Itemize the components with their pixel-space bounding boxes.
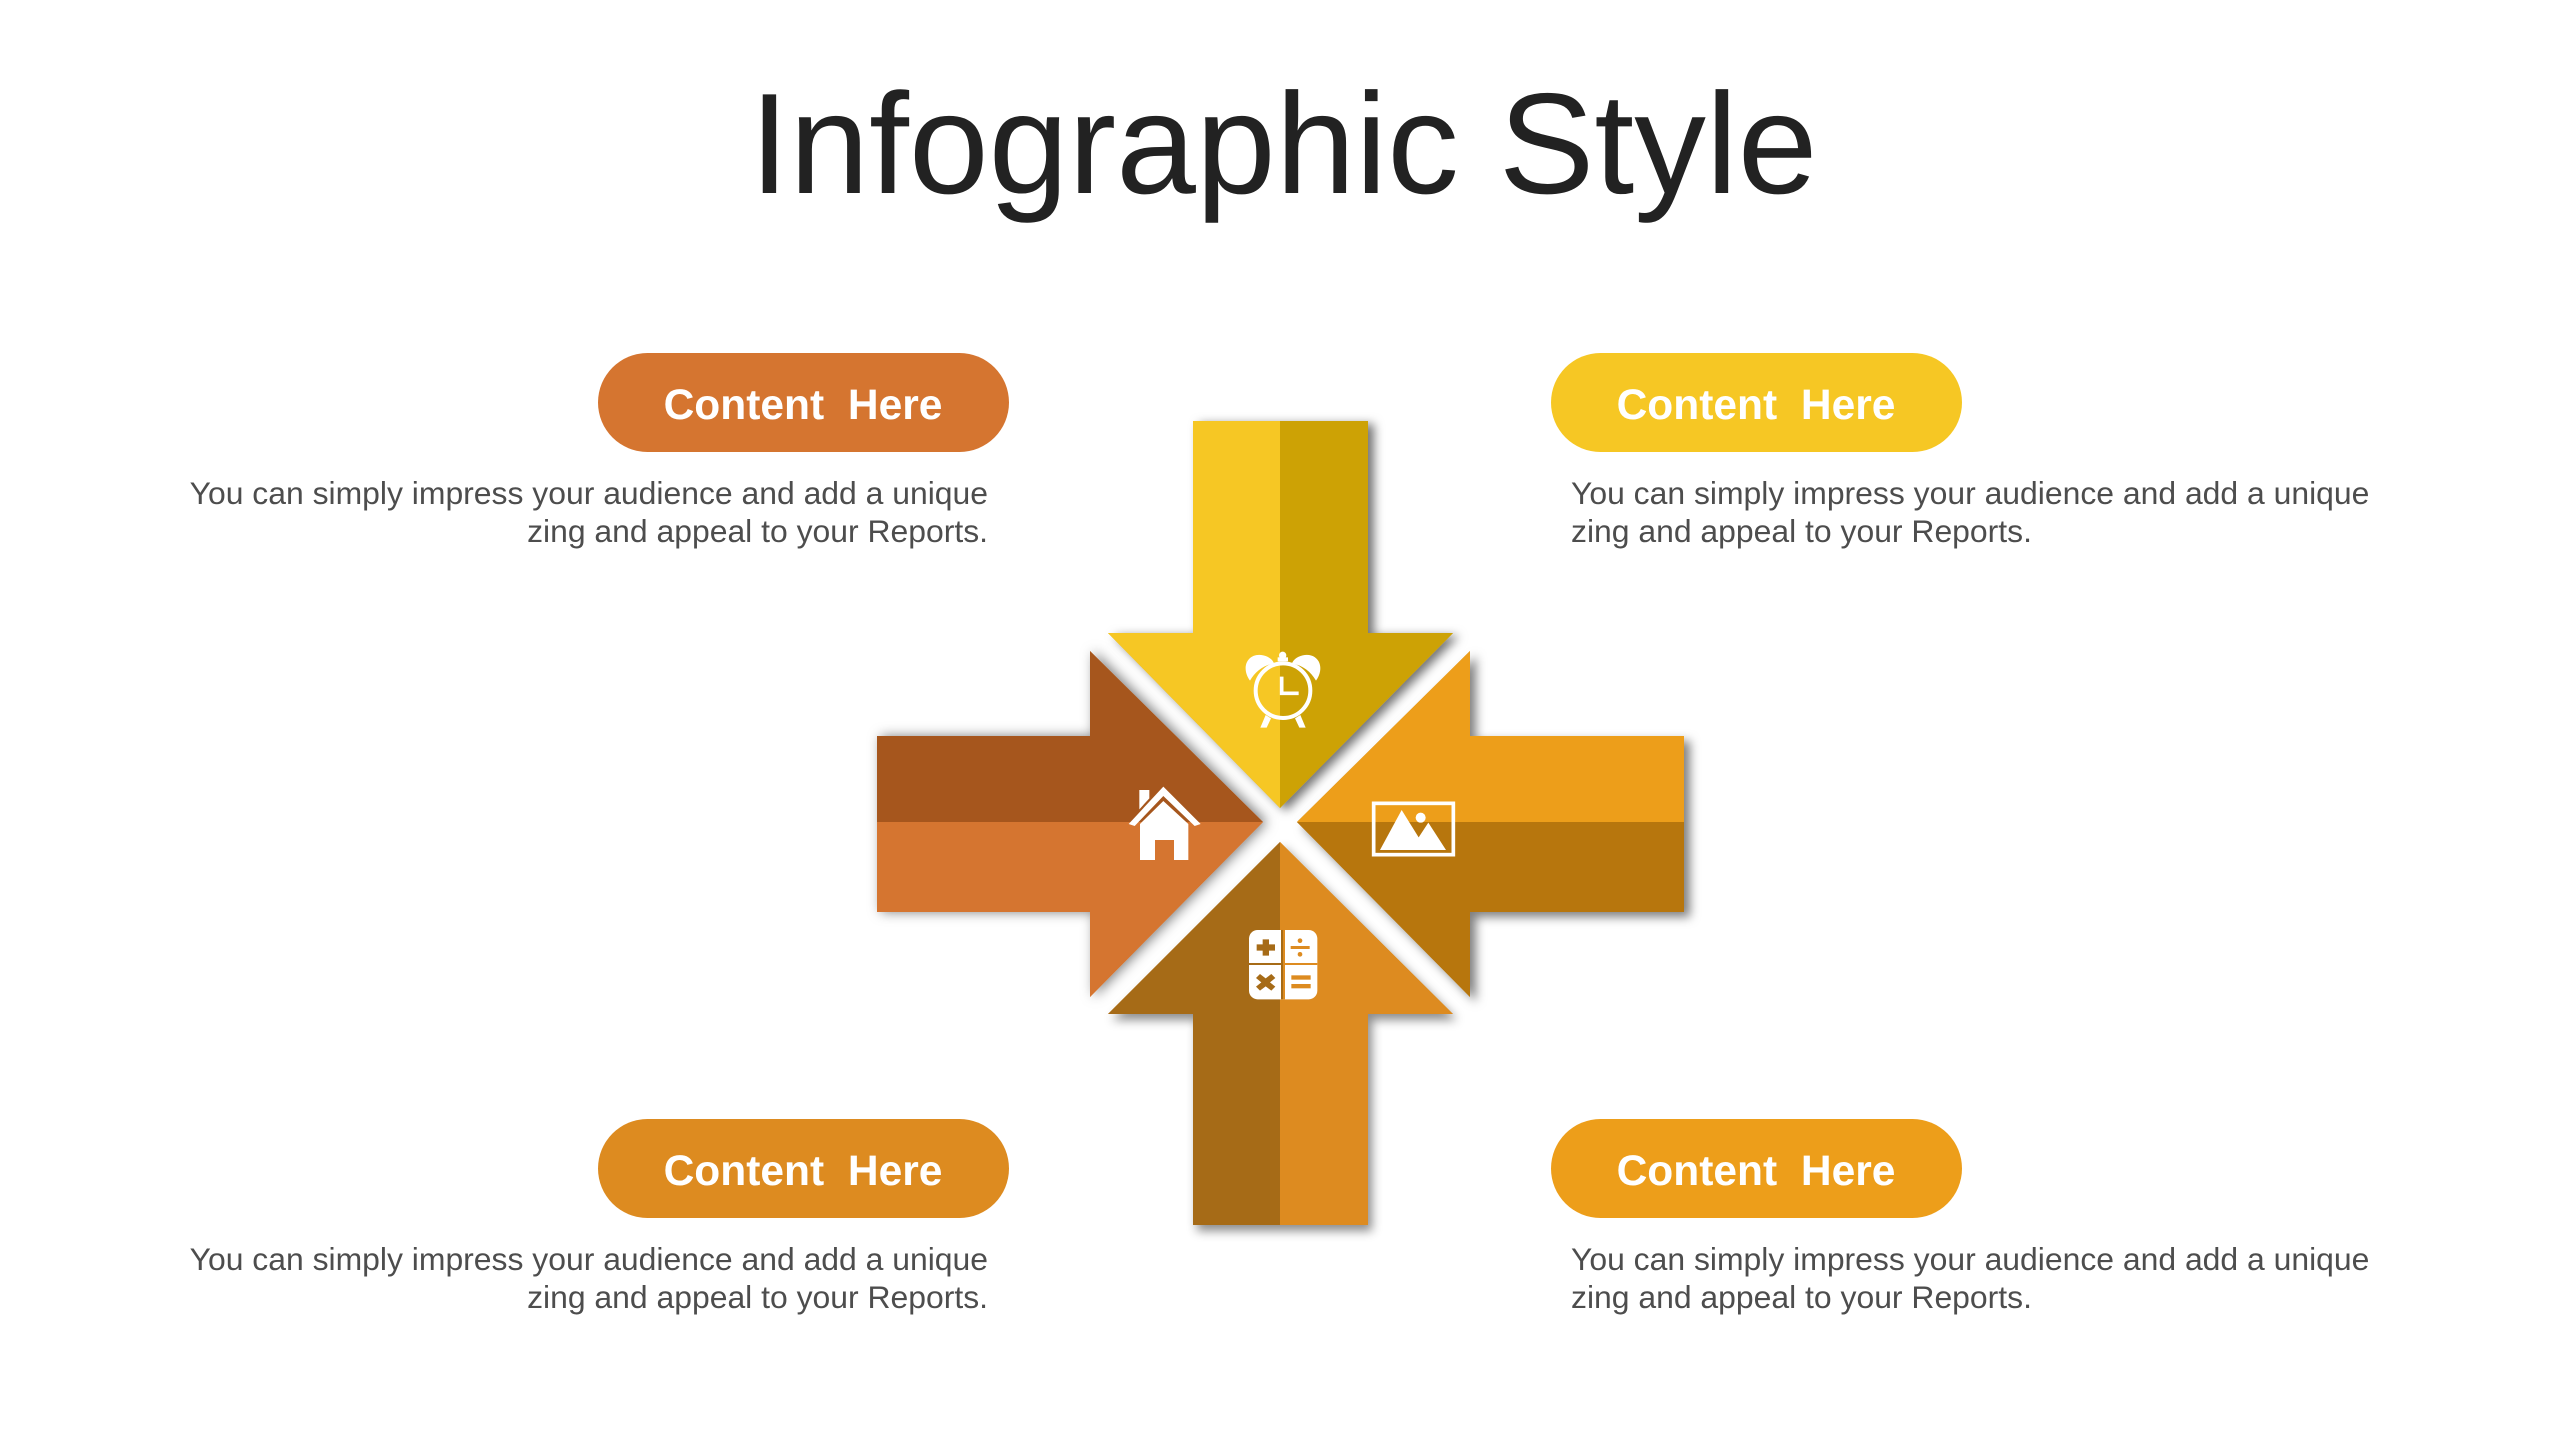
icon: calculator bbox=[1249, 930, 1317, 999]
title: Infographic Style bbox=[750, 64, 1817, 224]
pill: bottom-left bbox=[598, 1119, 1009, 1218]
arrow: top (clock) bbox=[1108, 421, 1453, 808]
text block: top-left: You can simply impress your audience and add a unique bbox=[190, 475, 988, 511]
arrow: left (home) bbox=[877, 651, 1263, 997]
pill: top-left: Content Here bbox=[664, 382, 942, 429]
pill: bottom-left: Content Here bbox=[664, 1148, 942, 1195]
pill: top-right: Content Here bbox=[1617, 382, 1895, 429]
panel: top-right content bbox=[1551, 353, 2369, 549]
text block: top-left: zing and appeal to your Reports. bbox=[527, 513, 988, 549]
pill: bottom-right bbox=[1551, 1119, 1962, 1218]
pill: top-left bbox=[598, 353, 1009, 452]
text block: bottom-left: You can simply impress your audience and add a unique bbox=[190, 1241, 988, 1277]
text block: top-right: You can simply impress your audience and add a unique bbox=[1571, 475, 2369, 511]
text block: bottom-left: zing and appeal to your Reports. bbox=[527, 1279, 988, 1315]
icon: house bbox=[1129, 787, 1201, 860]
pill: bottom-right: Content Here bbox=[1617, 1148, 1895, 1195]
icon: picture frame bbox=[1374, 803, 1453, 855]
panel: bottom-left content bbox=[190, 1119, 1009, 1315]
icon: alarm clock bbox=[1246, 652, 1320, 728]
pill: top-right bbox=[1551, 353, 1962, 452]
text block: bottom-right: zing and appeal to your Reports. bbox=[1571, 1279, 2032, 1315]
arrow: right (picture) bbox=[1297, 651, 1684, 997]
text block: bottom-right: You can simply impress your audience and add a unique bbox=[1571, 1241, 2369, 1277]
text block: top-right: zing and appeal to your Reports. bbox=[1571, 513, 2032, 549]
panel: bottom-right content bbox=[1551, 1119, 2369, 1315]
panel: top-left content bbox=[190, 353, 1009, 549]
arrow: bottom (calculator) bbox=[1108, 842, 1453, 1225]
